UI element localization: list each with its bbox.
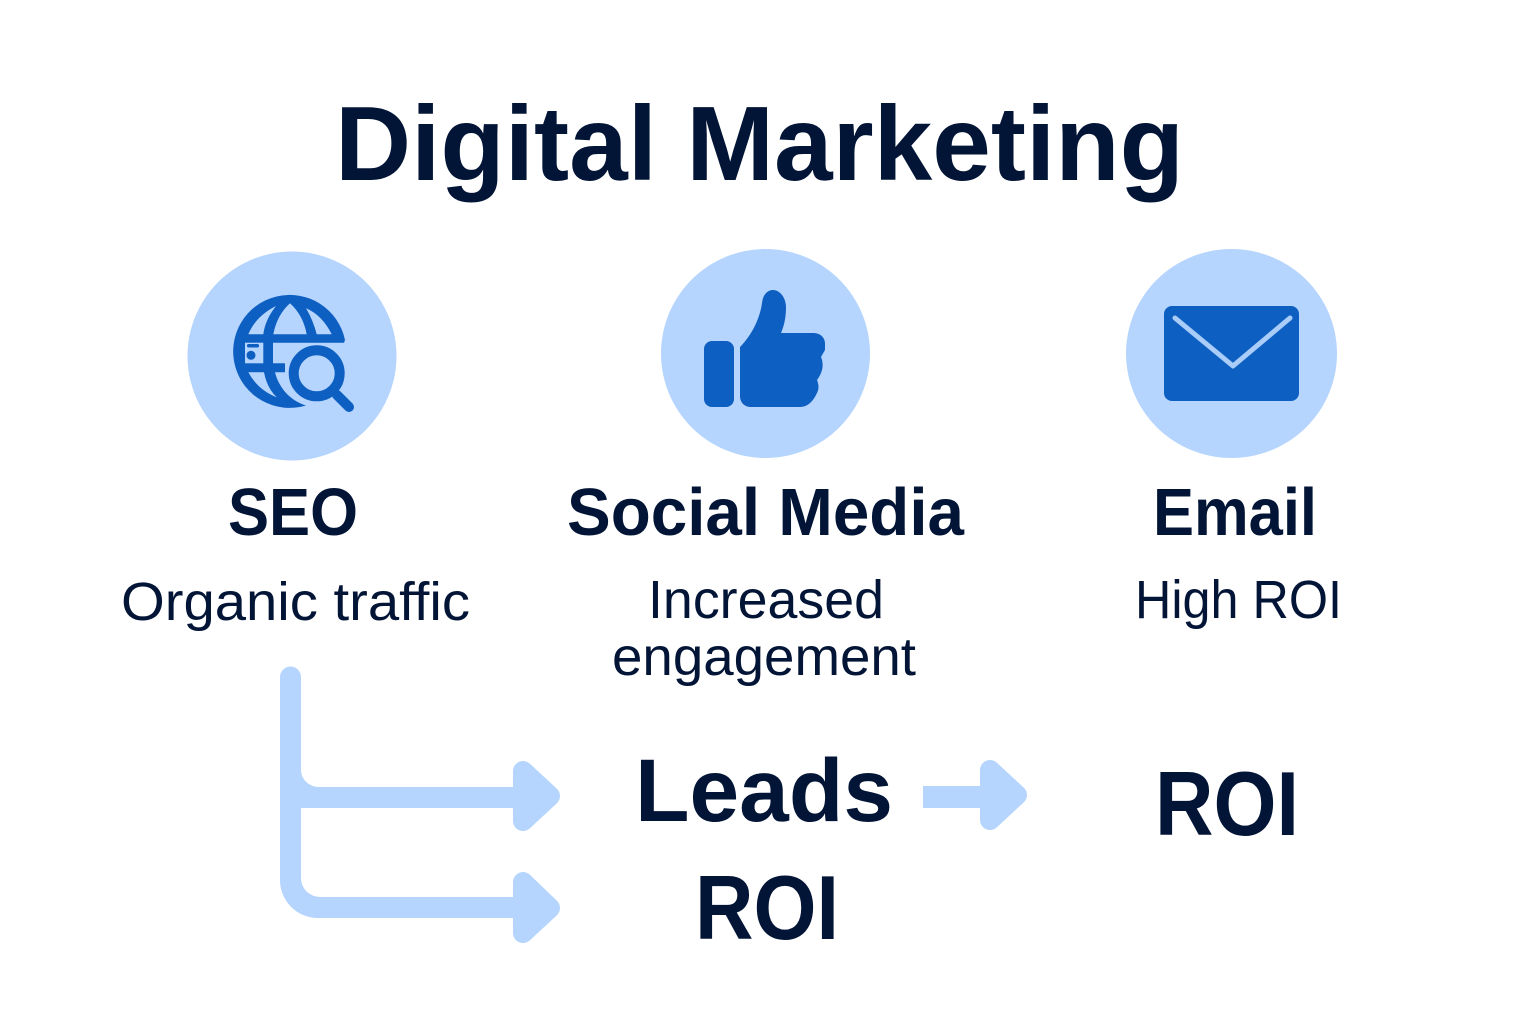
heading: Email: Email — [1153, 475, 1317, 550]
text: high ROI: High ROI — [1135, 570, 1342, 630]
panel: Email — [1126, 249, 1342, 630]
heading: Social Media: Social Media — [567, 475, 965, 550]
label: ROI right: ROI — [1155, 754, 1299, 855]
icon: globe with magnifier — [188, 252, 396, 460]
arrow: Leads to ROI — [923, 770, 1017, 820]
panel: Social Media — [567, 249, 965, 687]
label: ROI bottom: ROI — [695, 858, 839, 959]
panel: SEO — [121, 252, 470, 632]
icon: envelope — [1126, 249, 1337, 458]
icon: thumbs up — [661, 249, 870, 458]
title: Digital Marketing — [335, 85, 1184, 203]
text: increased engagement — [612, 570, 916, 687]
heading: SEO: SEO — [228, 475, 358, 550]
arrow: branching flow from SEO to Leads and ROI — [280, 666, 550, 933]
text: increased engagement: engagement — [612, 627, 916, 687]
text: organic traffic: Organic traffic — [121, 572, 470, 632]
text: increased engagement: Increased — [648, 570, 884, 630]
label: Leads: Leads — [635, 740, 893, 840]
